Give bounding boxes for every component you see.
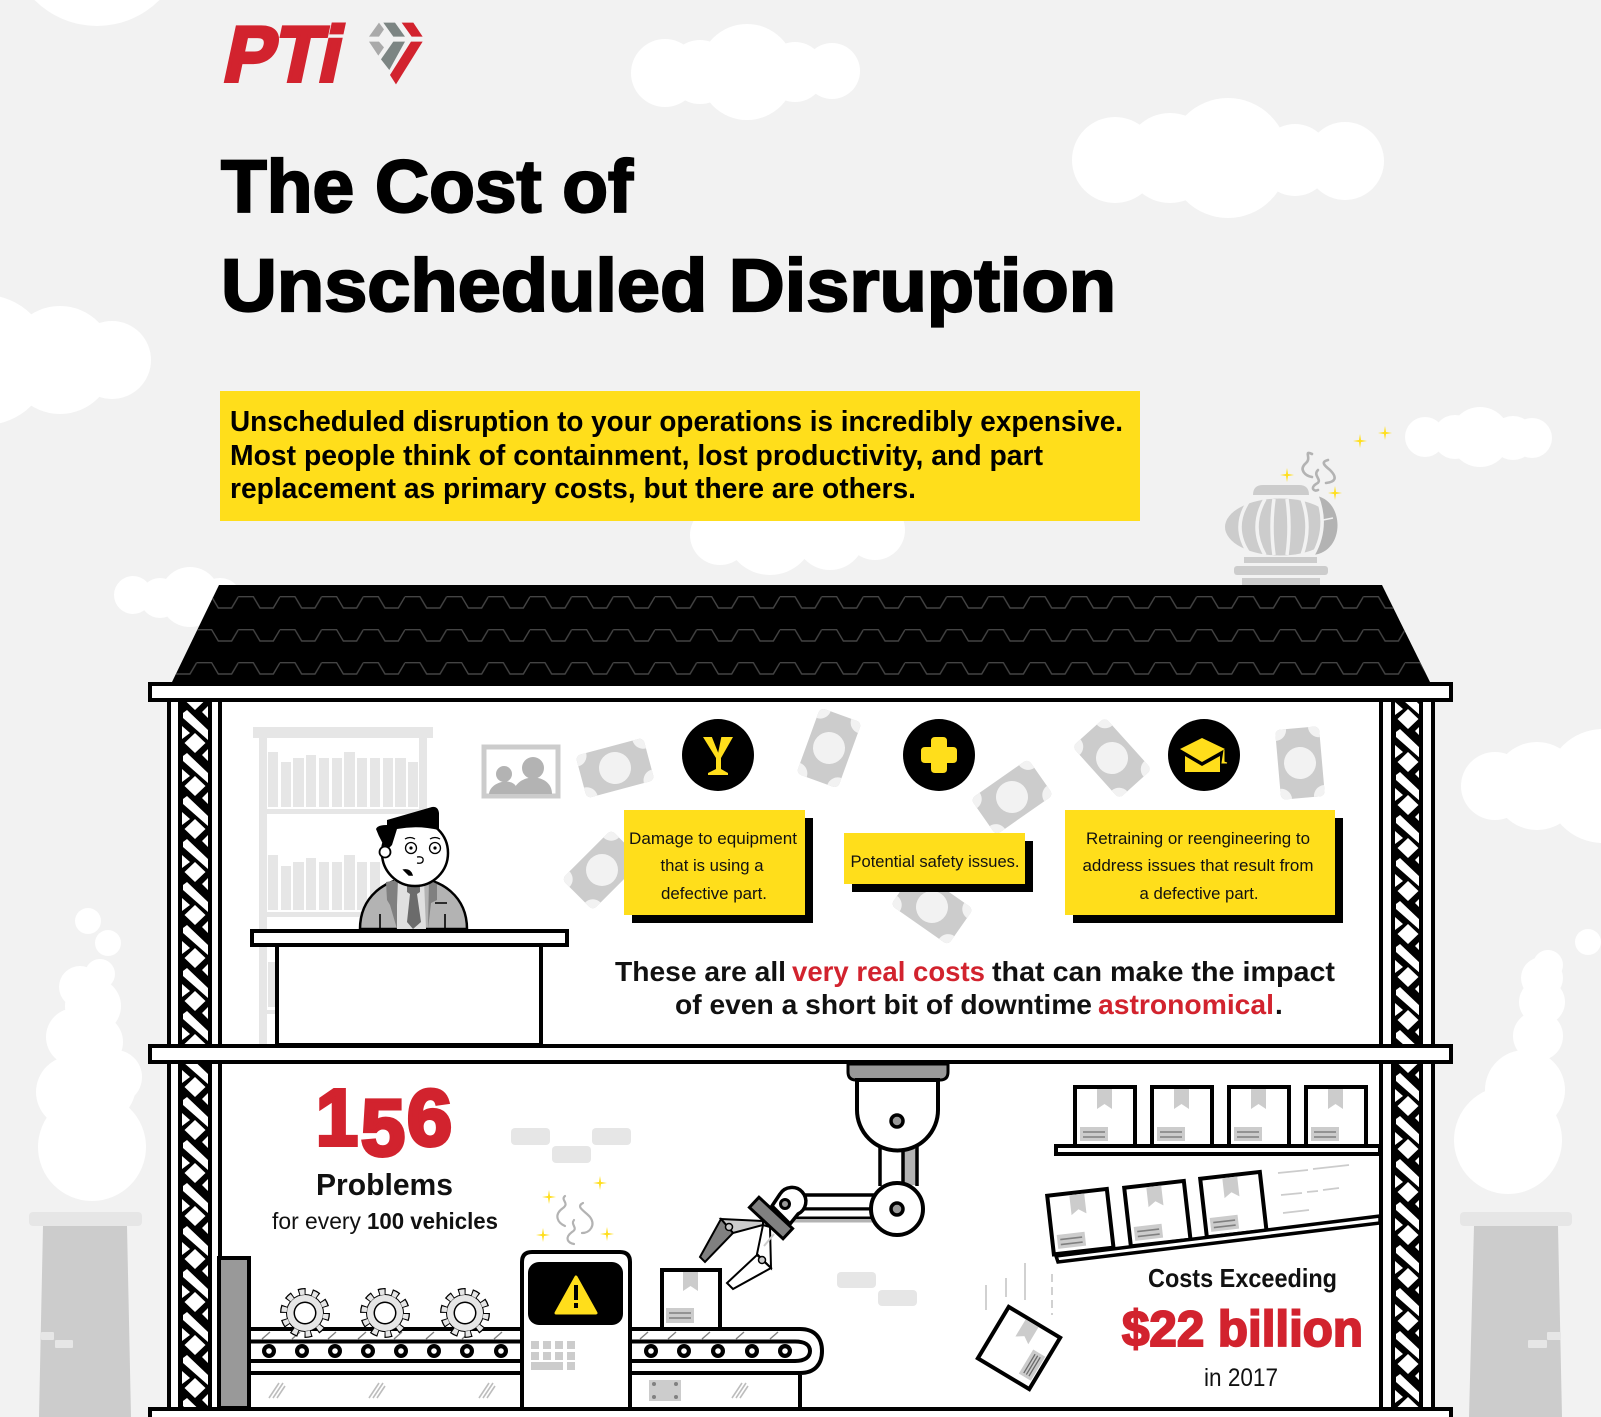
roof vent bbox=[1225, 426, 1392, 586]
cost box: retraining: Retraining or reengineering to bbox=[1086, 829, 1310, 848]
house interior bbox=[222, 700, 1379, 1407]
picture frame bbox=[484, 747, 558, 796]
intro callout bbox=[220, 391, 1140, 521]
clouds bbox=[0, 0, 1601, 843]
machine with warning screen bbox=[522, 1252, 630, 1407]
cost box: damage to equipment bbox=[624, 810, 813, 923]
box on conveyor bbox=[662, 1270, 720, 1329]
cost box: retraining: a defective part. bbox=[1140, 884, 1258, 903]
summary statement: These are all bbox=[615, 956, 786, 987]
background bricks bbox=[511, 1128, 917, 1306]
stat: $22 billion: in 2017 bbox=[1204, 1364, 1278, 1392]
logo bbox=[217, 11, 423, 98]
cost box: retraining: address issues that result from bbox=[1082, 856, 1314, 875]
left factory chimney with smoke bbox=[29, 908, 146, 1417]
stat: $22 billion: $22 billion bbox=[1122, 1301, 1363, 1357]
title: Unscheduled Disruption bbox=[221, 244, 1116, 327]
stat: $22 billion: Costs Exceeding bbox=[1148, 1263, 1337, 1293]
tilted shelf with boxes bbox=[1047, 1165, 1380, 1262]
top shelf with boxes bbox=[1056, 1087, 1380, 1154]
bookshelf bbox=[253, 727, 433, 1044]
stat: $22 billion bbox=[1122, 1263, 1363, 1392]
worried man at desk bbox=[252, 807, 567, 1045]
support post bbox=[219, 1258, 249, 1408]
cost box: retraining bbox=[1065, 810, 1343, 923]
logo: PTi bbox=[217, 11, 352, 98]
summary statement: of even a short bit of downtime bbox=[675, 989, 1092, 1020]
cost icon: graduation cap bbox=[1168, 719, 1240, 791]
stat: 156 problems: 5 bbox=[361, 1083, 405, 1172]
title bbox=[221, 145, 1116, 327]
robotic arm bbox=[700, 1064, 948, 1289]
cost box: safety issues: Potential safety issues. bbox=[850, 852, 1020, 871]
cost box: damage to equipment: that is using a bbox=[660, 856, 764, 875]
summary statement: astronomical bbox=[1098, 989, 1274, 1020]
stat: 156 problems bbox=[272, 1073, 498, 1234]
flying money bills bbox=[546, 693, 1337, 960]
stat: 156 problems: 6 bbox=[407, 1073, 452, 1162]
cost icon: broken glass bbox=[682, 719, 754, 791]
left column bbox=[167, 700, 222, 1407]
stat: 156 problems: 1 bbox=[316, 1073, 358, 1162]
intro callout: Most people think of containment, lost productivity, and part bbox=[230, 440, 1043, 472]
gears on conveyor bbox=[284, 1292, 486, 1334]
stat: 156 problems: Problems bbox=[316, 1167, 453, 1202]
roof bbox=[172, 585, 1430, 682]
summary statement: very real costs bbox=[792, 956, 985, 987]
right factory chimney with smoke bbox=[1454, 929, 1601, 1417]
cost box: safety issues bbox=[844, 833, 1033, 892]
intro callout: replacement as primary costs, but there are others. bbox=[230, 473, 916, 505]
stat: 156 problems: 100 vehicles bbox=[367, 1208, 498, 1234]
summary statement bbox=[615, 956, 1335, 1020]
beams bbox=[150, 684, 1451, 1417]
title: The Cost of bbox=[221, 145, 633, 228]
stat: 156 problems: for every bbox=[272, 1208, 361, 1234]
cost box: damage to equipment: defective part. bbox=[661, 884, 767, 903]
right column bbox=[1379, 700, 1435, 1407]
summary statement: . bbox=[1275, 989, 1283, 1020]
cost icon: medical cross bbox=[903, 719, 975, 791]
intro callout: Unscheduled disruption to your operations is incredibly expensive. bbox=[230, 406, 1123, 438]
falling box bbox=[978, 1263, 1060, 1389]
conveyor belt bbox=[250, 1329, 822, 1407]
machine smoke bbox=[536, 1176, 614, 1244]
summary statement: that can make the impact bbox=[992, 956, 1335, 987]
cost box: damage to equipment: Damage to equipment bbox=[629, 829, 797, 848]
